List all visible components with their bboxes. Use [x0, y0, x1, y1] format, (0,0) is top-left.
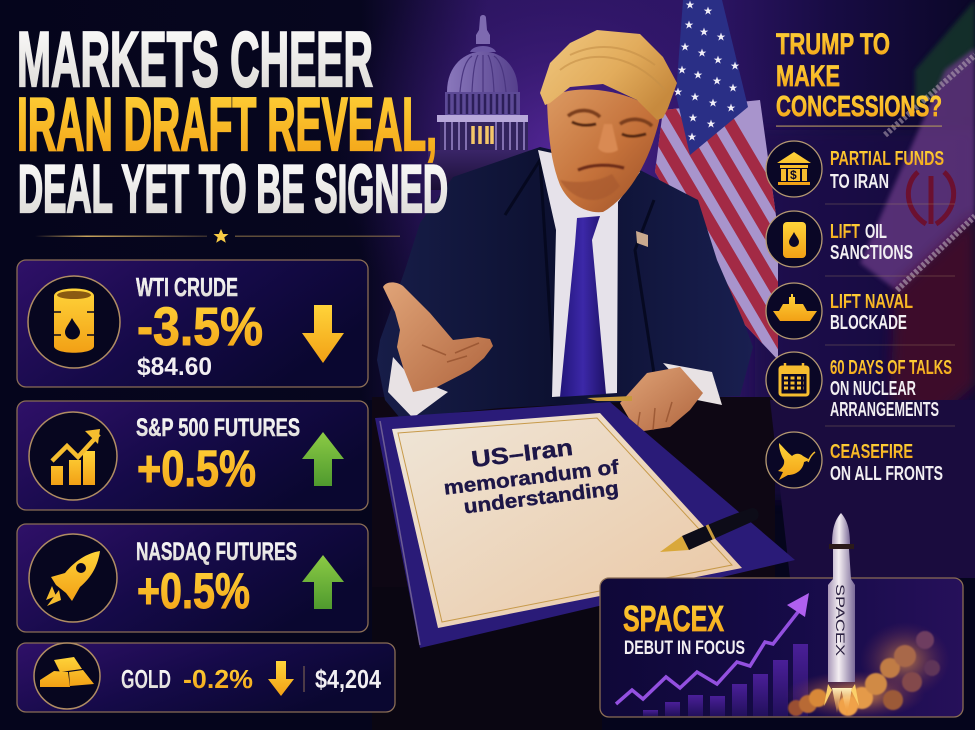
heading: TRUMP TO — [776, 28, 890, 61]
item: partial funds: TO IRAN — [830, 171, 889, 193]
left cuff — [388, 357, 448, 418]
metric text — [136, 414, 300, 497]
heading: MAKE — [776, 60, 840, 93]
document title — [443, 434, 620, 518]
item: lift oil sanctions: SANCTIONS — [830, 242, 913, 264]
illustration: memorandum folder — [375, 402, 795, 648]
growth arrow — [616, 593, 809, 704]
panel: Nasdaq futures — [17, 524, 368, 632]
document title: memorandum of — [443, 456, 620, 500]
right cuff — [663, 363, 722, 405]
face — [547, 89, 660, 212]
panel: concessions — [766, 28, 955, 488]
icon: rising chart — [29, 412, 117, 500]
item: partial funds — [766, 141, 944, 197]
rocket: SPACEX — [833, 584, 847, 656]
arrow: down — [302, 305, 344, 363]
title: MARKETS CHEER — [17, 15, 373, 103]
item: lift naval blockade: BLOCKADE — [830, 312, 907, 334]
icon: rocket — [29, 534, 117, 622]
panel: S&P 500 futures — [17, 401, 368, 510]
document title: US–Iran — [470, 434, 574, 472]
metric text — [136, 538, 297, 619]
illustration: Trump figure — [377, 30, 753, 432]
item: partial funds: $ — [790, 168, 797, 182]
icon: oil barrel — [28, 276, 120, 368]
heading: SPACEX — [623, 598, 724, 639]
arrow: up — [302, 432, 344, 486]
paper — [392, 413, 742, 628]
heading — [623, 598, 745, 659]
illustration: Capitol dome — [428, 15, 540, 190]
left hand — [383, 282, 493, 392]
metric text: +0.5% — [137, 440, 256, 497]
title — [17, 15, 448, 227]
illustration: desk — [372, 397, 975, 730]
divider with star — [35, 229, 400, 243]
panel: gold — [17, 643, 395, 712]
metric text: +0.5% — [137, 563, 250, 619]
metric text: $4,204 — [315, 664, 381, 694]
item: lift naval blockade: LIFT NAVAL — [830, 291, 913, 313]
item: ceasefire: CEASEFIRE — [830, 441, 913, 463]
metric text: -3.5% — [137, 297, 263, 357]
illustration: Iran flag — [860, 0, 975, 420]
metric text: $84.60 — [137, 353, 212, 381]
panel: WTI crude — [17, 260, 368, 387]
heading — [776, 28, 942, 123]
title: IRAN DRAFT REVEAL, — [17, 82, 437, 166]
metric text: -0.2% — [183, 664, 253, 694]
arrow: down — [268, 661, 294, 696]
tie — [560, 216, 606, 397]
document title: understanding — [463, 478, 620, 518]
illustration: US flag — [655, 0, 778, 358]
rocket — [824, 513, 859, 716]
fountain pen — [660, 508, 759, 552]
shirt — [538, 150, 640, 397]
heading: DEBUT IN FOCUS — [624, 638, 745, 659]
item: ceasefire — [766, 432, 943, 488]
lapel pin — [636, 231, 648, 247]
item: lift naval blockade — [766, 283, 913, 339]
item: lift oil sanctions: LIFT — [830, 221, 860, 243]
icon: gold bars — [34, 643, 100, 709]
item: lift oil sanctions: OIL — [865, 221, 887, 243]
metric text: WTI CRUDE — [136, 272, 238, 302]
small gold pen — [587, 396, 632, 401]
right hand — [620, 367, 703, 432]
metric text: NASDAQ FUTURES — [136, 538, 297, 566]
title: DEAL YET TO BE SIGNED — [18, 151, 448, 227]
bar chart — [643, 644, 808, 716]
metric text: GOLD — [121, 664, 171, 694]
metric text: S&P 500 FUTURES — [136, 414, 300, 442]
panel: SpaceX — [600, 513, 963, 719]
hair — [540, 30, 677, 120]
arrow: up — [302, 555, 344, 609]
item: lift oil sanctions — [766, 211, 913, 267]
metric text — [121, 664, 381, 694]
item: 60 days of talks: ON NUCLEAR — [830, 378, 916, 400]
metric text — [136, 272, 263, 381]
exhaust clouds — [785, 622, 950, 719]
suit — [377, 147, 753, 418]
item: 60 days of talks — [766, 352, 952, 421]
